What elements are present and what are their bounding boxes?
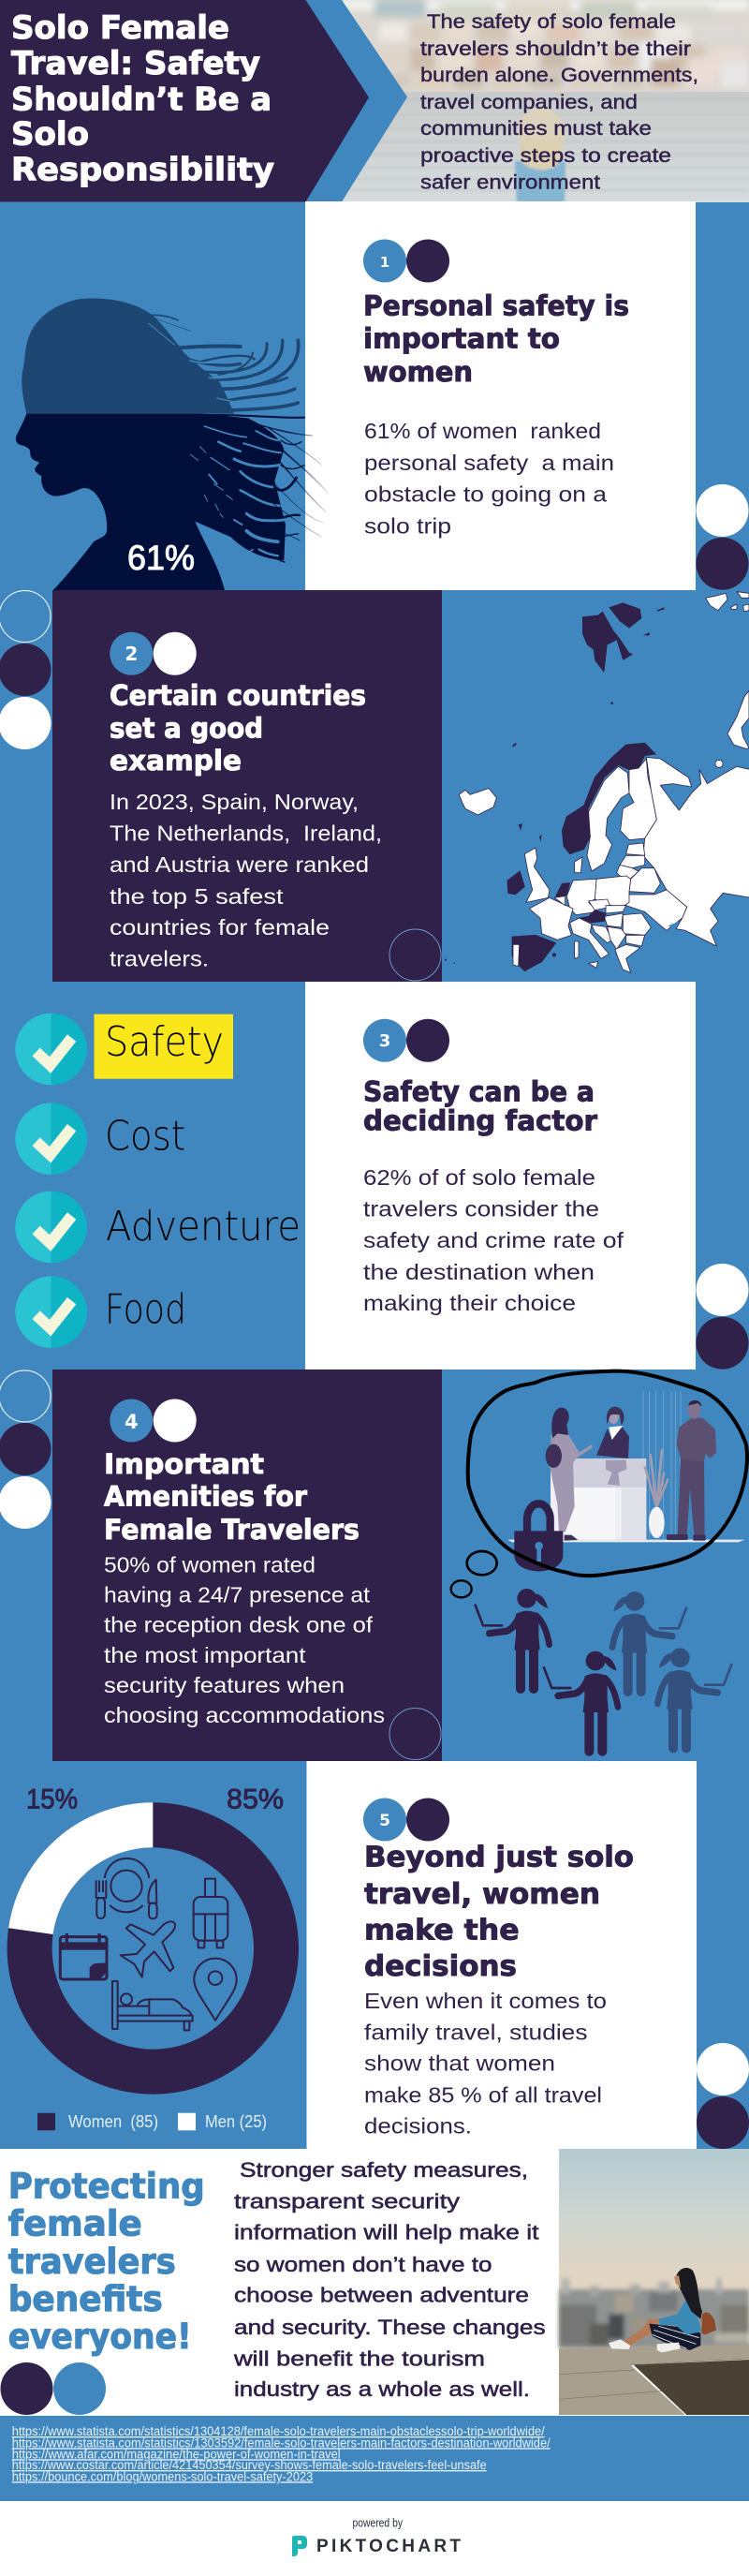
references footer: https://bounce.com/blog/womens-solo-travel-safety-2023 — [12, 2469, 313, 2483]
references footer: https://www.statista.com/statistics/1303592/female-solo-travelers-main-factors-destination-worldwide/ — [12, 2435, 551, 2450]
closing text: so women don’t have to — [234, 2253, 492, 2276]
number badge 3: 3 — [379, 1031, 390, 1051]
body 4: choosing accommodations — [104, 1703, 385, 1727]
body 5: Even when it comes to — [364, 1989, 607, 2013]
body 4: the most important — [104, 1643, 306, 1667]
number badge 1: 1 — [380, 254, 389, 271]
reception scene — [507, 1391, 744, 1542]
body 3 — [363, 1165, 624, 1315]
icon: suitcase — [194, 1879, 228, 1947]
heading 4: Amenities for — [104, 1481, 308, 1513]
number badge 5 — [363, 1799, 449, 1842]
references footer: https://www.afar.com/magazine/the-power-of-women-in-travel — [12, 2447, 341, 2461]
body 4: 50% of women rated — [104, 1553, 316, 1577]
title: Solo — [11, 116, 89, 154]
body 3: 62% of of solo female — [363, 1165, 595, 1190]
right decorative circles 5 — [697, 2043, 749, 2149]
body 4: the reception desk one of — [104, 1613, 374, 1637]
body 4: having a 24/7 presence at — [104, 1583, 371, 1607]
number badge 4 — [110, 1399, 197, 1443]
title — [11, 9, 274, 189]
closing section background — [0, 2149, 559, 2416]
closing heading: everyone! — [8, 2317, 192, 2357]
closing text: information will help make it — [234, 2221, 539, 2244]
closing text: choose between adventure — [234, 2284, 529, 2307]
right decorative circles 1 — [697, 484, 749, 590]
heading 5: decisions — [364, 1950, 517, 1983]
checklist — [15, 1014, 301, 1348]
thought bubble outline — [451, 1371, 747, 1597]
panel 4: amenities — [52, 1369, 442, 1761]
references footer — [0, 2416, 749, 2501]
map of Europe — [445, 592, 749, 972]
heading 4: Female Travelers — [104, 1514, 360, 1546]
closing heading: female — [8, 2204, 142, 2244]
closing decorative circles — [0, 2362, 106, 2415]
Piktochart credit — [292, 2516, 461, 2556]
item: Cost — [15, 1103, 185, 1175]
number badge 2: 2 — [125, 643, 138, 665]
heading 3 — [363, 1076, 598, 1137]
header photo: lakeside town with woman — [337, 0, 749, 202]
panel 2: certain countries — [52, 590, 442, 982]
body 2 — [110, 790, 382, 971]
body 1: personal safety a main — [364, 451, 614, 475]
Piktochart credit: PIKTOCHART — [316, 2537, 461, 2556]
body 1 — [364, 419, 614, 538]
body 2: countries for female — [110, 915, 330, 940]
closing text: and security. These changes — [234, 2316, 546, 2339]
Piktochart credit: powered by — [352, 2516, 403, 2530]
number badge 1 — [363, 240, 449, 283]
body 2: the top 5 safest — [110, 884, 284, 909]
number badge 3 — [363, 1019, 449, 1062]
chart legend — [37, 2112, 267, 2131]
body 5: make 85 % of all travel — [364, 2082, 602, 2107]
number badge 4: 4 — [125, 1411, 139, 1433]
chart legend: Men (25) — [205, 2112, 267, 2131]
closing text: industry as a whole as well. — [234, 2377, 530, 2401]
body 2: The Netherlands, Ireland, — [110, 822, 382, 846]
closing text: transparent security — [234, 2189, 461, 2213]
icon: plate and cutlery — [96, 1858, 157, 1918]
body 3: safety and crime rate of — [363, 1228, 624, 1252]
references footer: https://www.statista.com/statistics/1304128/female-solo-travelers-main-obstaclessolo-trip-worldwide/ — [12, 2424, 545, 2438]
heading 5: make the — [364, 1915, 520, 1947]
heading 2: Certain countries — [110, 680, 366, 712]
title: Solo Female — [11, 9, 229, 47]
icon: airplane — [121, 1921, 175, 1977]
closing heading: Protecting — [8, 2167, 205, 2207]
illustration: thought bubble with hotel reception and women — [451, 1371, 747, 1752]
header intro text: burden alone. Governments, — [420, 65, 698, 86]
body 5: family travel, studies — [364, 2020, 588, 2044]
header intro text: safer environment — [420, 172, 600, 193]
travel icons inside donut — [60, 1858, 237, 2030]
header chevron: blue — [305, 0, 407, 202]
title: Shouldn’t Be a — [11, 81, 272, 118]
heading 4 — [104, 1448, 360, 1546]
body 3: travelers consider the — [363, 1197, 599, 1221]
item: Adventure: Adventure — [106, 1203, 301, 1251]
icon: calendar — [60, 1933, 107, 1979]
heading 1: women — [363, 356, 473, 388]
page background — [0, 201, 749, 2150]
header intro text: travelers shouldn’t be their — [420, 38, 691, 60]
references footer: https://www.costar.com/article/421450354/survey-shows-female-solo-travelers-feel-unsafe — [12, 2458, 487, 2472]
body 3: the destination when — [363, 1260, 595, 1284]
closing heading: travelers — [8, 2242, 176, 2282]
body 1: 61% of women ranked — [364, 419, 601, 443]
item: Safety: Safety — [105, 1018, 224, 1066]
title: Responsibility — [11, 152, 274, 189]
heading 1 — [363, 290, 629, 388]
heading 2 — [110, 680, 366, 777]
closing heading — [8, 2167, 205, 2357]
donut chart: women vs men decisions — [8, 1784, 284, 2131]
header intro text: proactive steps to create — [420, 145, 671, 167]
body 4: security features when — [104, 1673, 345, 1697]
number badge 2 — [110, 632, 197, 675]
icon: bed — [112, 1981, 193, 2030]
heading 5 — [364, 1842, 634, 1983]
icon group: women with laptops — [476, 1589, 731, 1752]
icon: padlock — [514, 1503, 563, 1572]
heading 3: deciding factor — [363, 1105, 598, 1137]
stat: 61%: 61% — [127, 539, 195, 577]
label: 85%: 85% — [227, 1784, 284, 1815]
header intro text: travel companies, and — [420, 92, 638, 113]
body 2: In 2023, Spain, Norway, — [110, 790, 359, 814]
closing text: will benefit the tourism — [233, 2347, 485, 2371]
closing heading: benefits — [8, 2279, 163, 2319]
figure — [609, 2268, 716, 2352]
chart legend: Women (85) — [68, 2112, 158, 2131]
closing text — [233, 2158, 546, 2401]
heading 3: Safety can be a — [363, 1076, 595, 1108]
photo: woman sitting on a ledge above a city — [559, 2149, 749, 2415]
header intro text: communities must take — [420, 118, 652, 140]
body 5 — [364, 1989, 607, 2138]
icon: Piktochart logo — [292, 2536, 307, 2556]
label: 15%: 15% — [26, 1784, 78, 1815]
item: Food: Food — [105, 1286, 186, 1334]
body 2: travelers. — [110, 947, 209, 971]
header chevron: navy — [0, 0, 369, 202]
heading 5: Beyond just solo — [364, 1842, 634, 1874]
left decorative circles 2 — [0, 590, 51, 749]
body 5: decisions. — [364, 2113, 472, 2138]
heading 2: set a good — [110, 713, 263, 745]
left decorative circles 4 — [0, 1370, 51, 1529]
heading 1: Personal safety is — [363, 290, 629, 322]
body 5: show that women — [364, 2051, 555, 2076]
header intro text — [420, 11, 698, 193]
heading 2: example — [110, 745, 242, 777]
body 3: making their choice — [363, 1291, 576, 1315]
icon: map pin — [194, 1959, 237, 2021]
heading 4: Important — [104, 1448, 264, 1480]
title: Travel: Safety — [11, 45, 260, 82]
header intro text: The safety of solo female — [427, 11, 676, 33]
item: Adventure — [15, 1192, 301, 1263]
silhouette: woman's head with windblown hair — [16, 298, 328, 590]
closing text: Stronger safety measures, — [240, 2158, 528, 2182]
body 2: and Austria were ranked — [110, 852, 369, 877]
panel 3: deciding factor — [305, 982, 696, 1369]
body 1: solo trip — [364, 513, 451, 538]
item: Safety — [15, 1014, 233, 1085]
right decorative circles 3 — [697, 1264, 749, 1369]
panel 1: personal safety — [305, 201, 696, 590]
item: Cost: Cost — [105, 1113, 185, 1161]
panel 5: beyond solo travel — [307, 1761, 697, 2149]
heading 1: important to — [363, 322, 560, 354]
body 1: obstacle to going on a — [364, 481, 607, 506]
item: Food — [15, 1276, 186, 1348]
number badge 5: 5 — [379, 1812, 390, 1830]
body 4 — [104, 1553, 385, 1727]
heading 5: travel, women — [364, 1878, 600, 1911]
